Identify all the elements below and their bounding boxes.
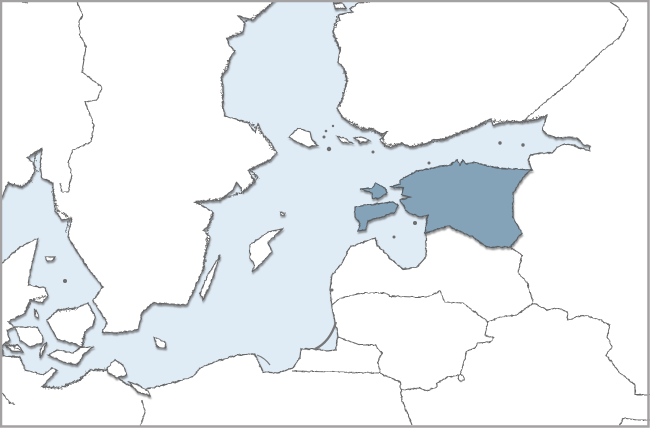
border: Latvia and Belarus xyxy=(488,303,533,322)
border: Norway and Sweden xyxy=(60,2,102,192)
border: Lithuania and Belarus xyxy=(402,322,494,391)
island: Gotska Sandon xyxy=(280,212,285,215)
border: Germany and Netherlands xyxy=(2,393,15,404)
coast: Denmark channels xyxy=(5,296,85,350)
Estonia mainland xyxy=(390,160,532,247)
border: Estonia, Latvia and Russia xyxy=(510,247,533,302)
island: Rugen xyxy=(107,360,127,378)
island: Zealand xyxy=(47,303,95,347)
border: Finland and Russia xyxy=(523,2,628,121)
island: Samso xyxy=(35,310,38,318)
border: Kaliningrad xyxy=(338,337,382,373)
island: Oland xyxy=(200,255,220,300)
Saaremaa xyxy=(355,202,398,231)
coast: Swedish southeast xyxy=(203,212,213,270)
coast: Oslofjord xyxy=(8,150,42,187)
island: Langeland xyxy=(40,342,47,358)
coast: Gulf of Finland north xyxy=(410,116,547,147)
Curonian Spit xyxy=(315,322,336,349)
Vistula Spit xyxy=(257,355,270,365)
border: Poland and Kaliningrad xyxy=(292,371,380,373)
coast: Pomerania xyxy=(42,370,107,388)
coast: Finland west xyxy=(333,15,347,108)
Hiiumaa xyxy=(360,183,387,199)
island: Laeso xyxy=(45,257,55,261)
coast: Turku archipelago xyxy=(343,118,402,146)
coast: Stockholm archipelago xyxy=(197,122,275,203)
island: Lolland and Falster xyxy=(48,347,93,365)
border: top left corner xyxy=(17,1,28,3)
island: Gotland xyxy=(250,229,282,272)
island: Turku archipelago west xyxy=(337,136,352,143)
island: Bornholm xyxy=(154,337,166,348)
archipelago and jagged coast xyxy=(5,5,547,388)
small islets xyxy=(63,125,525,292)
coast: Gulf of Bothnia west xyxy=(222,5,270,107)
border: Latvia and Lithuania xyxy=(332,291,488,322)
island: Fyn xyxy=(15,327,43,347)
border: Germany and Poland xyxy=(140,400,145,426)
border: Poland and Lithuania xyxy=(380,373,412,425)
island: Aland xyxy=(289,128,318,147)
island: Turku archipelago east xyxy=(354,137,370,143)
border: Belarus, Russia and Ukraine xyxy=(533,303,650,395)
border: southeast corner xyxy=(620,418,650,425)
island: Usedom xyxy=(129,382,150,396)
island: Als xyxy=(6,345,23,352)
Estonia xyxy=(355,160,532,247)
island: northern Finland skerries xyxy=(333,3,346,9)
islands xyxy=(6,3,370,396)
coast: Bohuslan xyxy=(53,190,70,232)
border detail: enclave circle xyxy=(458,375,464,381)
